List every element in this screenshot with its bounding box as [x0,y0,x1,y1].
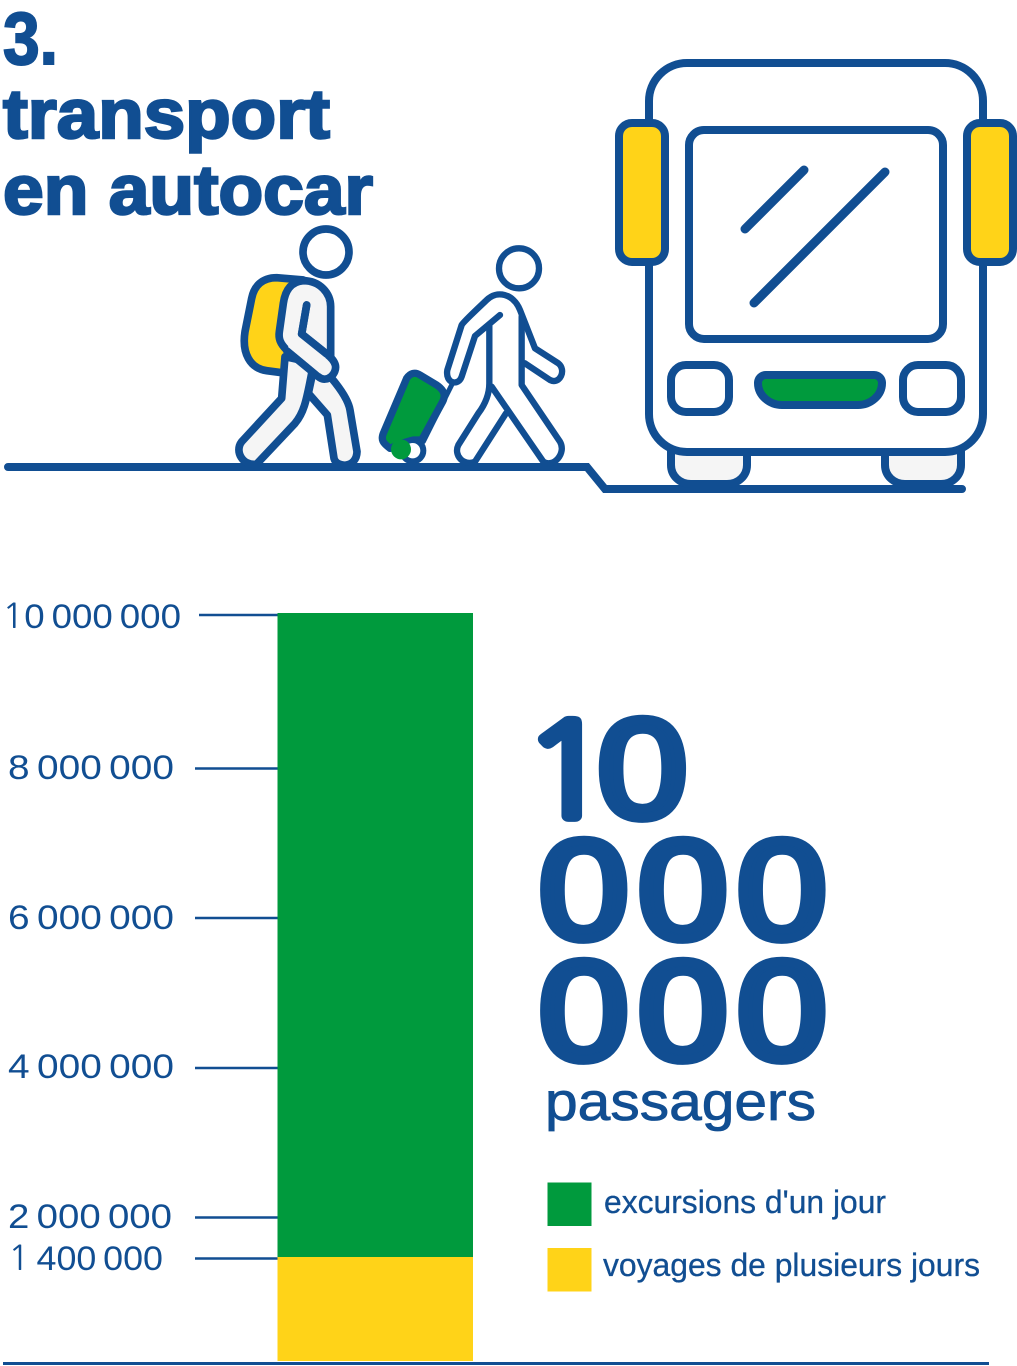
axis labels: 10 000 000 [2,598,181,636]
key figure: 10 000 000 passagers: passagers [545,1072,816,1132]
axis labels [2,598,181,1278]
legend swatch: yellow [548,1248,592,1292]
key figure: 10 000 000 passagers: 000 [539,932,836,1089]
traveller body outline [447,294,562,382]
grille [758,375,882,405]
title: transport [3,75,330,153]
legend swatch: green [548,1182,592,1226]
icon: coach front [619,63,1013,484]
illustration: travellers and coach [8,63,1013,489]
suitcase wheel [402,440,423,461]
windshield glints [745,170,885,303]
hiker torso and arm [279,281,331,357]
bar segment: voyages de plusieurs jours [278,1257,473,1361]
traveller head [499,248,539,288]
backpack [244,278,303,373]
wheels [671,445,747,484]
traveller torso and legs [457,325,506,463]
suitcase body [382,373,444,448]
suitcase handle [423,385,452,442]
axis ticks [195,615,278,1258]
bar chart [2,598,989,1365]
chart baseline [3,1362,989,1365]
left mirror [619,123,665,262]
key figure: 10 000 000 passagers: 000 [539,811,836,968]
hiker front leg [308,370,357,465]
right mirror [967,123,1013,262]
icon: hiker with backpack [239,229,357,465]
key figure: 10 000 000 passagers: 0 [598,690,697,847]
left headlight [671,365,729,412]
axis labels: 2 000 000 [8,1198,172,1236]
windshield [689,130,943,339]
bar segment: excursions d'un jour [278,613,473,1257]
hiker back leg [239,357,331,464]
title: en autocar [3,151,373,229]
legend label: excursions: excursions d'un jour [604,1184,886,1220]
hiker head [303,229,349,275]
right headlight [903,365,961,412]
key figure: 10 000 000 passagers: 1 [522,707,622,836]
axis labels: 1 400 000 [8,1240,163,1278]
axis labels: 8 000 000 [8,749,174,787]
key figure: 10 000 000 passagers [522,690,836,1132]
title [3,0,373,229]
axis labels: 4 000 000 [8,1048,174,1086]
legend label: voyages: voyages de plusieurs jours [603,1247,980,1283]
ground line [8,467,962,489]
legend [548,1182,980,1292]
coach body [649,63,983,452]
icon: traveller with suitcase [382,248,562,463]
axis labels: 6 000 000 [8,899,174,937]
